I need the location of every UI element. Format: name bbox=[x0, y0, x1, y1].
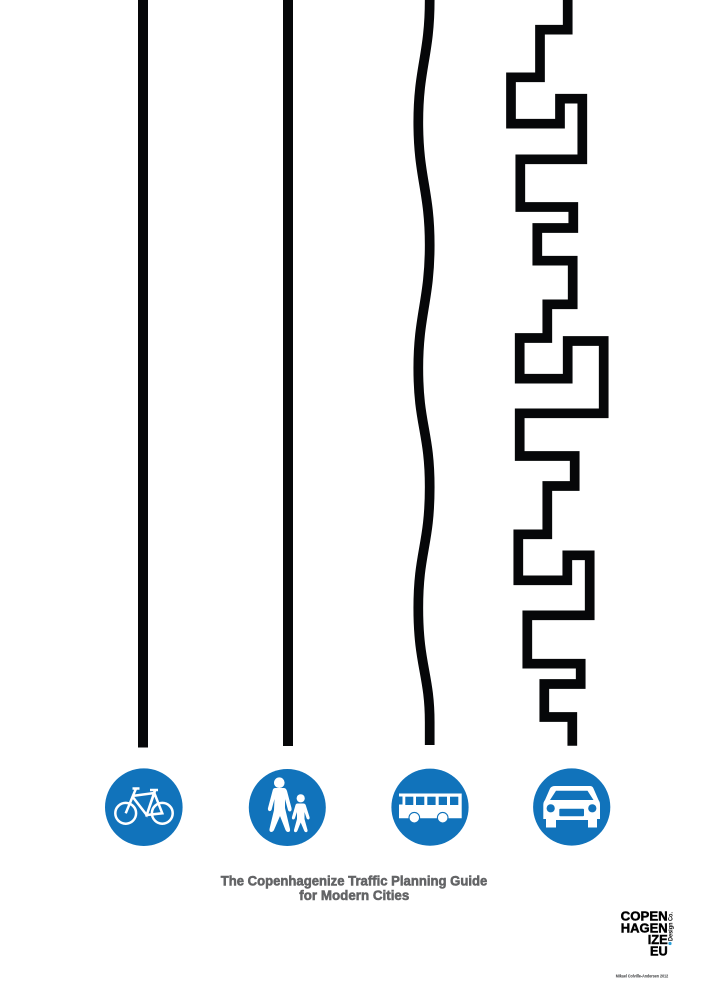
line: wavy bus route bbox=[418, 0, 430, 745]
logo: Copenhagenize Design Co.: Design Co. bbox=[668, 912, 674, 941]
icon: bus sign bbox=[391, 769, 469, 846]
icon: bicycle sign bbox=[105, 768, 183, 846]
icon: car sign bbox=[533, 768, 610, 846]
logo: Copenhagenize Design Co.: HAGEN bbox=[621, 920, 668, 935]
line: jagged car route bbox=[511, 0, 604, 746]
logo: Copenhagenize Design Co. bbox=[621, 909, 674, 959]
title: The Copenhagenize Traffic Planning Guide bbox=[221, 874, 488, 889]
line: straight pedestrian route bbox=[283, 0, 293, 746]
credit: Mikael Colville-Andersen 2012 bbox=[616, 974, 669, 979]
icon: pedestrians sign bbox=[249, 769, 326, 846]
line: straight bicycle route bbox=[138, 0, 148, 748]
logo: Copenhagenize Design Co.: EU bbox=[650, 944, 668, 959]
logo: Copenhagenize Design Co.: COPEN bbox=[621, 909, 668, 924]
logo: Copenhagenize Design Co.: IZE bbox=[648, 932, 668, 947]
title bbox=[221, 874, 488, 903]
title: for Modern Cities bbox=[299, 888, 409, 903]
